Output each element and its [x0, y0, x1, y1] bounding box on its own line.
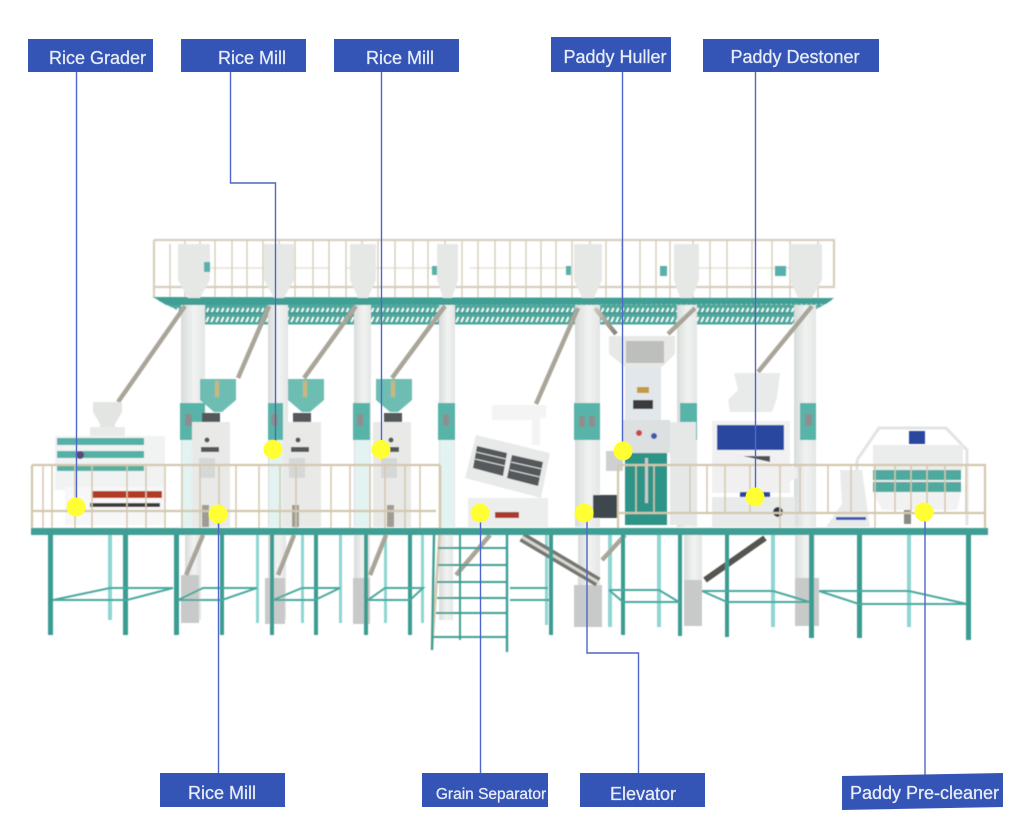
- label: Rice Grader: [28, 39, 153, 72]
- machine: grain separator: [465, 405, 550, 527]
- machine: elevator motor: [593, 495, 617, 518]
- label: Rice Mill (top left): [181, 39, 306, 72]
- label: Rice Mill (bottom): [160, 773, 285, 807]
- lower platform front legs: [48, 535, 971, 640]
- label: Grain Separator: Grain Separator: [436, 786, 546, 803]
- label: Rice Mill (top left): Rice Mill: [218, 48, 286, 68]
- marker dots: [66, 440, 934, 524]
- label: Rice Mill (top centre): [334, 39, 459, 72]
- label: Rice Grader: Rice Grader: [49, 48, 146, 68]
- access ladder: [432, 535, 507, 652]
- machine: rice grader: [55, 402, 165, 525]
- machine: paddy pre-cleaner: [826, 428, 967, 527]
- label: Paddy Huller: [551, 37, 671, 72]
- label: Rice Mill (bottom): Rice Mill: [188, 783, 256, 803]
- bucket elevator columns: [178, 244, 822, 627]
- elevator teal bands: [180, 403, 816, 440]
- lower platform deck: [31, 528, 988, 535]
- lower platform cross bracing: [53, 588, 967, 604]
- label: Paddy Pre-cleaner: [842, 773, 1003, 810]
- elevator heads: [178, 244, 822, 298]
- label: Grain Separator: [422, 773, 548, 807]
- connector lines: [76, 72, 925, 776]
- label: Rice Mill (top centre): Rice Mill: [366, 48, 434, 68]
- upper platform railing: [154, 240, 834, 298]
- label: Elevator: [580, 773, 705, 807]
- label: Elevator: Elevator: [610, 784, 676, 804]
- back legs of lower platform: [108, 535, 911, 627]
- label: Paddy Destoner: Paddy Destoner: [730, 47, 860, 67]
- label: Paddy Destoner: [703, 39, 879, 72]
- upper platform deck: [153, 297, 834, 324]
- label: Paddy Huller: Paddy Huller: [563, 47, 667, 67]
- machine: rice mill units: [192, 379, 412, 527]
- machinery illustration: [31, 240, 988, 652]
- lower platform railing: [32, 465, 985, 650]
- lower diagonal chute: [522, 537, 765, 582]
- machine: paddy destoner: [712, 373, 797, 527]
- machine: paddy huller: [606, 336, 696, 525]
- label: Paddy Pre-cleaner: Paddy Pre-cleaner: [850, 783, 999, 803]
- discharge pipes: [118, 306, 812, 575]
- elevator feet: [181, 575, 819, 627]
